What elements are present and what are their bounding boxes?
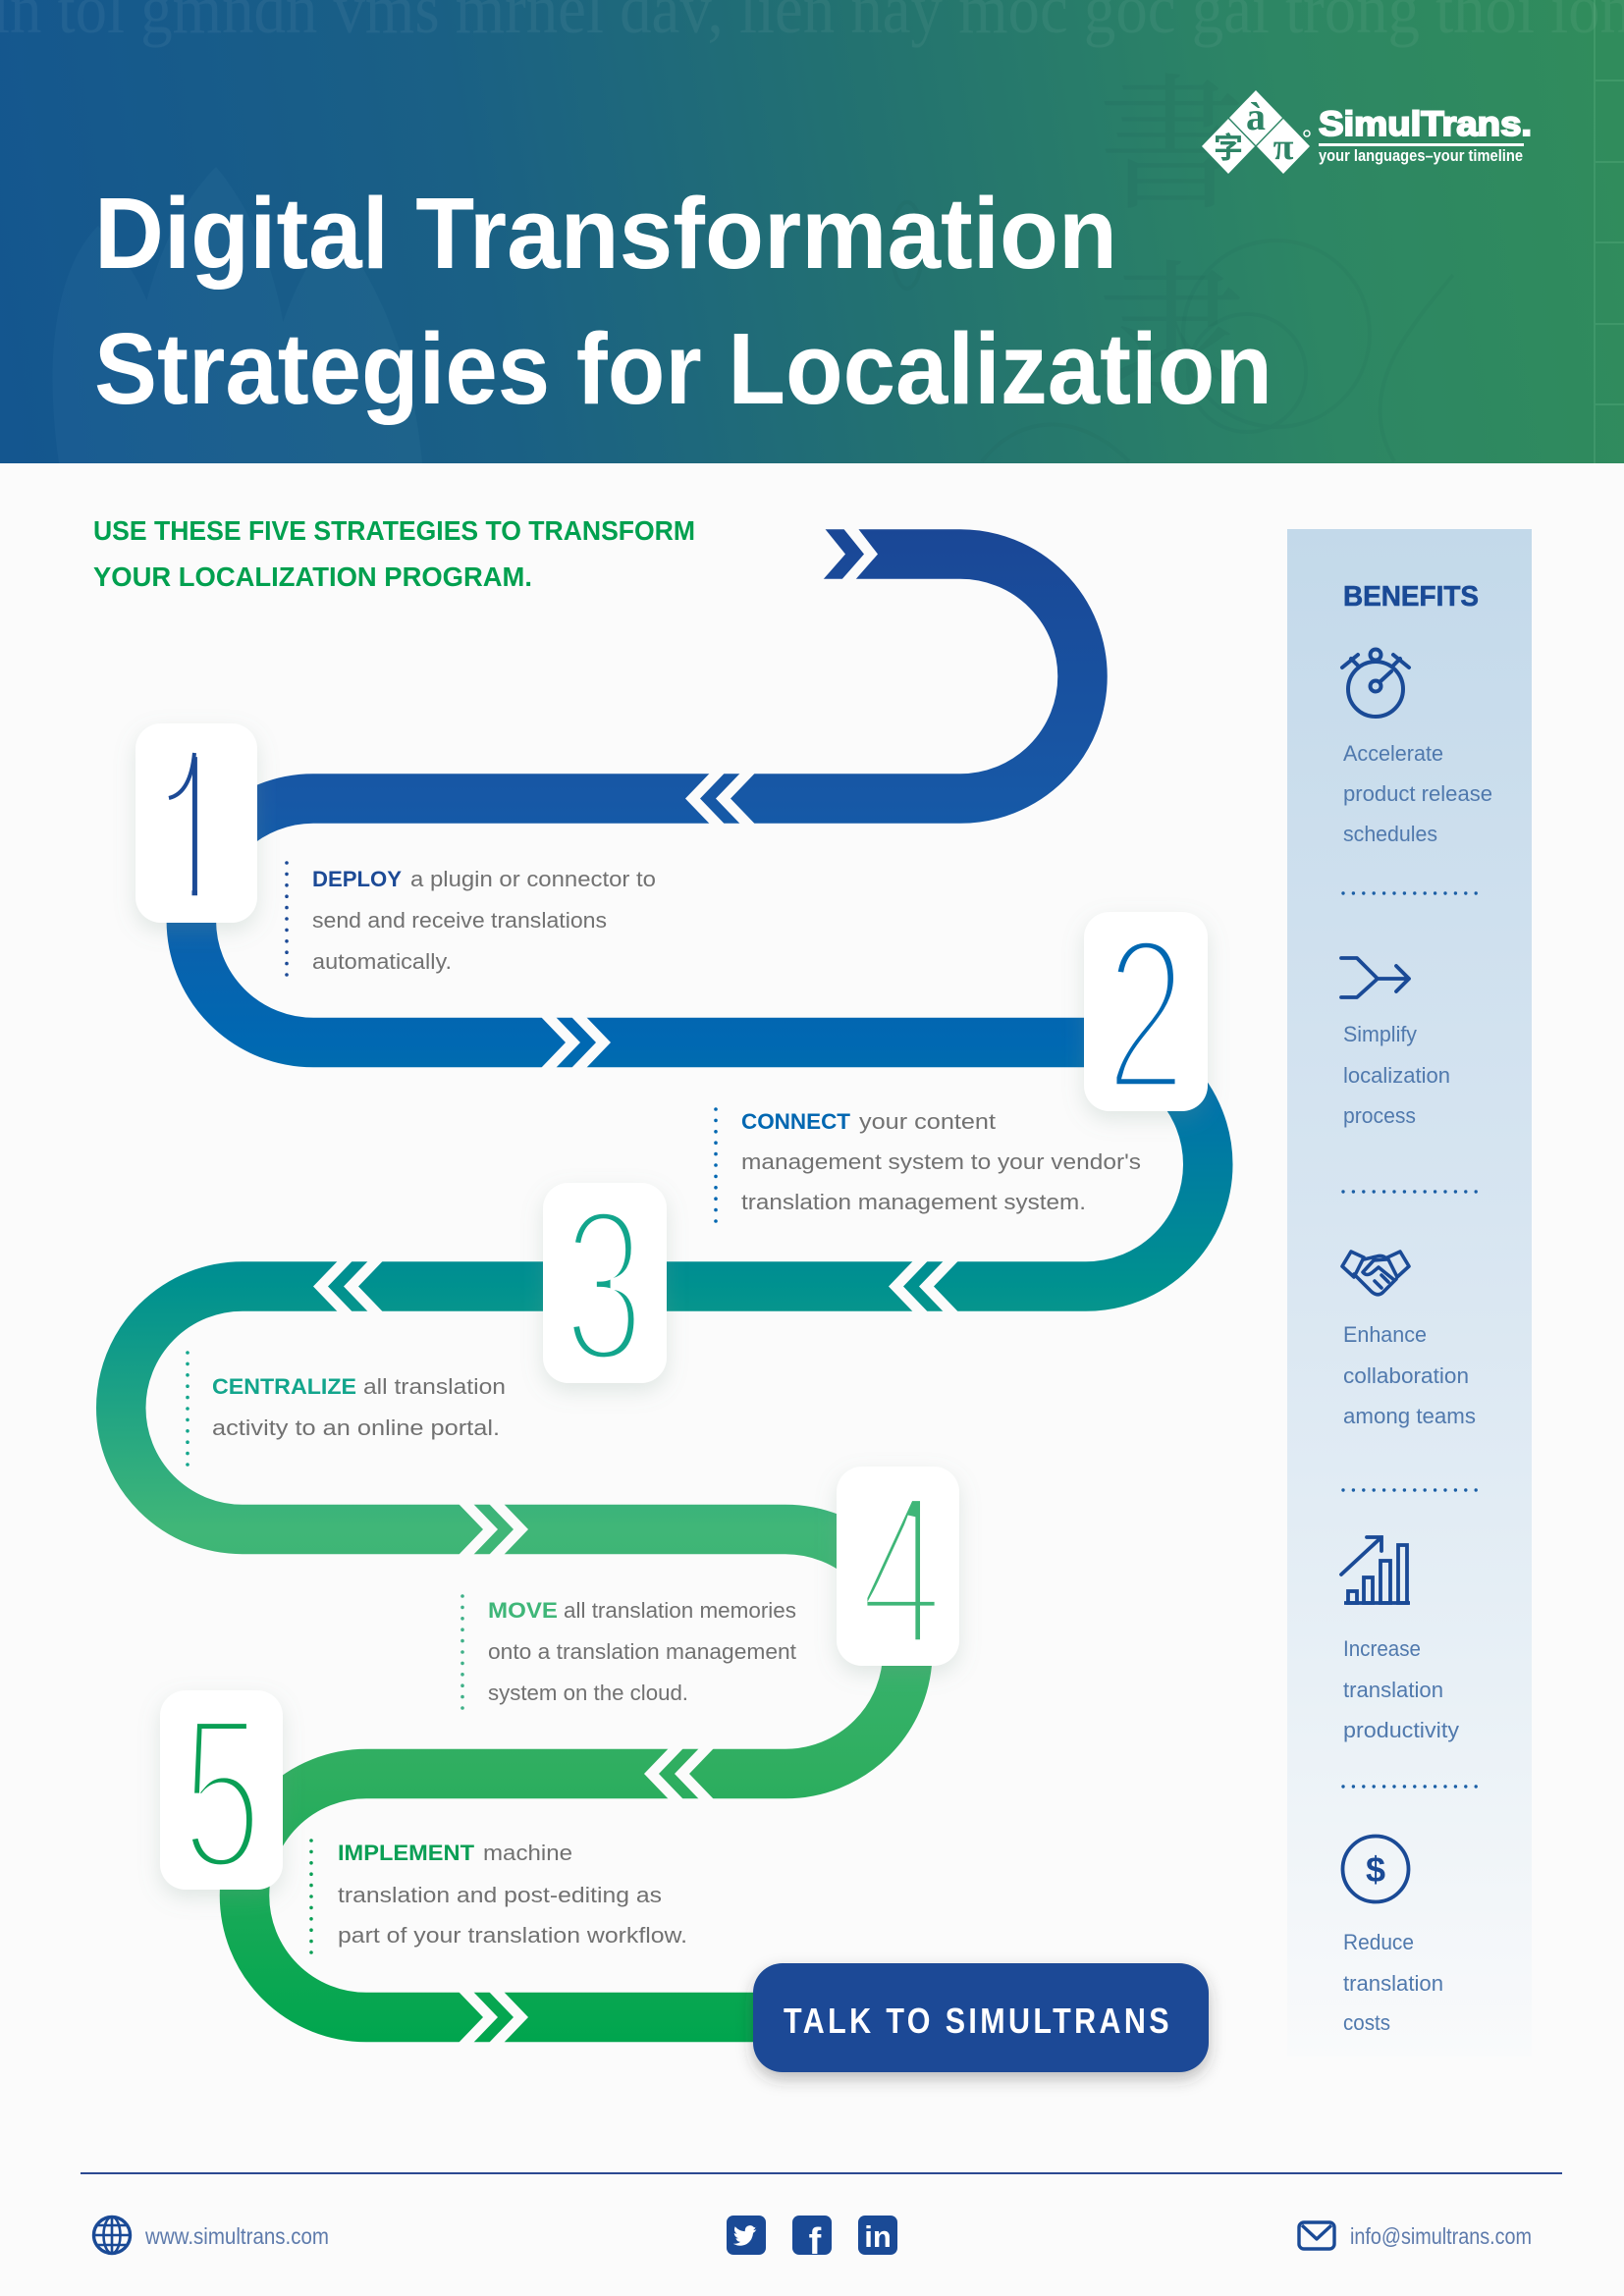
- arrows: band 6, pointing right: [459, 1992, 528, 2043]
- card: number 3: [543, 1163, 667, 1407]
- step 1 text: a plugin or connector to: [410, 867, 656, 891]
- header banner: 隶: [1098, 213, 1245, 425]
- card: number 2: 2: [1106, 892, 1186, 1136]
- title: [94, 177, 1272, 425]
- benefit: enhance: among teams: [1343, 1404, 1476, 1428]
- icon: merge arrow: [1341, 958, 1409, 997]
- button: talk to simultrans: [753, 1963, 1209, 2072]
- step 3 text: activity to an online portal.: [212, 1415, 500, 1440]
- step 1 text: automatically.: [312, 949, 452, 974]
- card: number 2: [1084, 892, 1208, 1136]
- header banner: [0, 0, 1624, 463]
- website: www.simultrans.com: [144, 2223, 329, 2249]
- icon: facebook: [792, 2216, 832, 2263]
- winding road path: [121, 526, 1208, 2017]
- benefit: accelerate: [1343, 741, 1492, 846]
- step 1 text: [287, 863, 656, 976]
- title: Strategies for Localization: [94, 312, 1272, 425]
- benefit: reduce: Reduce: [1343, 1930, 1414, 1954]
- email: info@simultrans.com: [1350, 2223, 1532, 2249]
- benefit: enhance: collaboration: [1343, 1363, 1469, 1388]
- step 4 text: [462, 1596, 796, 1709]
- logo: SimulTrans: SimulTrans.: [1319, 105, 1532, 143]
- card: number 1: 1: [155, 705, 230, 948]
- benefit: increase: translation: [1343, 1678, 1443, 1702]
- arrows: band 2, pointing right: [541, 1017, 611, 1068]
- step 5 text: [311, 1841, 687, 1953]
- icon: globe: [94, 2216, 130, 2254]
- benefit: simplify: localization: [1343, 1063, 1450, 1088]
- icon: twitter: [727, 2216, 766, 2255]
- button: talk to simultrans: TALK TO SIMULTRANS: [784, 2001, 1172, 2041]
- benefit: reduce: translation: [1343, 1971, 1443, 1996]
- icon: facebook: f: [809, 2221, 822, 2263]
- icon: stopwatch: [1342, 650, 1409, 717]
- step 3 text: CENTRALIZE: [212, 1374, 356, 1399]
- step 2 text: CONNECT: [741, 1109, 851, 1134]
- step 5 text: part of your translation workflow.: [338, 1923, 687, 1948]
- step 4 text: system on the cloud.: [488, 1681, 688, 1705]
- logo: SimulTrans: [1202, 90, 1532, 174]
- benefit: accelerate: Accelerate: [1343, 741, 1443, 766]
- logo: SimulTrans: à: [1246, 94, 1266, 138]
- benefit: simplify: process: [1343, 1103, 1416, 1128]
- arrows: band 3 left, pointing left: [313, 1260, 383, 1311]
- card: number 4: 4: [860, 1449, 943, 1692]
- intro heading: YOUR LOCALIZATION PROGRAM.: [93, 561, 532, 592]
- benefit: simplify: Simplify: [1343, 1022, 1417, 1046]
- footer rule: [81, 2172, 1562, 2174]
- title: Digital Transformation: [94, 177, 1117, 290]
- logo: SimulTrans: π: [1273, 127, 1294, 168]
- benefit: enhance: Enhance: [1343, 1322, 1427, 1347]
- arrows: band 1, pointing left: [685, 774, 755, 825]
- benefit: increase: productivity: [1343, 1718, 1459, 1742]
- step 2 text: [716, 1109, 1141, 1223]
- step 1 text: send and receive translations: [312, 908, 607, 933]
- step 3 text: [188, 1353, 506, 1467]
- benefits heading: BENEFITS: [1343, 581, 1479, 613]
- icon: handshake: [1342, 1252, 1409, 1295]
- step 4 text: onto a translation management: [488, 1639, 796, 1664]
- card: number 5: [160, 1671, 283, 1914]
- step 5 text: machine: [483, 1841, 572, 1865]
- step 2 text: translation management system.: [741, 1190, 1086, 1214]
- benefit: increase: [1343, 1636, 1459, 1742]
- benefit: accelerate: schedules: [1343, 822, 1437, 846]
- step 2 text: your content: [859, 1109, 996, 1134]
- benefit: increase: Increase: [1343, 1636, 1421, 1661]
- step 5 text: translation and post-editing as: [338, 1883, 662, 1907]
- step 5 text: IMPLEMENT: [338, 1841, 475, 1865]
- card: number 1: [135, 705, 257, 948]
- header banner: 書: [1098, 27, 1245, 239]
- step 1 text: DEPLOY: [312, 867, 402, 891]
- icon: dollar coin: [1343, 1836, 1408, 1902]
- benefit: enhance: [1343, 1322, 1476, 1428]
- logo: SimulTrans: your languages–your timeline: [1319, 146, 1523, 165]
- benefit: reduce: costs: [1343, 2010, 1390, 2035]
- arrows: band 4, pointing right: [459, 1504, 528, 1555]
- card: number 3: 3: [564, 1163, 644, 1407]
- benefit: accelerate: product release: [1343, 781, 1492, 806]
- arrows: band 3 right, pointing left: [889, 1260, 958, 1311]
- intro heading: [93, 515, 695, 592]
- step 4 text: MOVE: [488, 1598, 558, 1623]
- benefit: reduce: [1343, 1930, 1443, 2035]
- arrows: band 5, pointing left: [644, 1748, 714, 1799]
- card: number 4: [837, 1449, 959, 1692]
- benefit: simplify: [1343, 1022, 1450, 1128]
- panel: benefits: [1287, 529, 1532, 2056]
- icon: envelope: [1299, 2222, 1334, 2249]
- icon: linkedin: in: [864, 2219, 892, 2254]
- icon: growth chart: [1341, 1537, 1410, 1603]
- step 4 text: all translation memories: [564, 1598, 796, 1623]
- card: number 5: 5: [182, 1671, 262, 1914]
- icon: dollar coin: $: [1366, 1849, 1385, 1890]
- logo: SimulTrans: 字: [1214, 124, 1243, 167]
- step 3 text: all translation: [363, 1374, 506, 1399]
- icon: linkedin: [858, 2216, 897, 2255]
- step 2 text: management system to your vendor's: [741, 1149, 1141, 1174]
- intro heading: USE THESE FIVE STRATEGIES TO TRANSFORM: [93, 515, 695, 546]
